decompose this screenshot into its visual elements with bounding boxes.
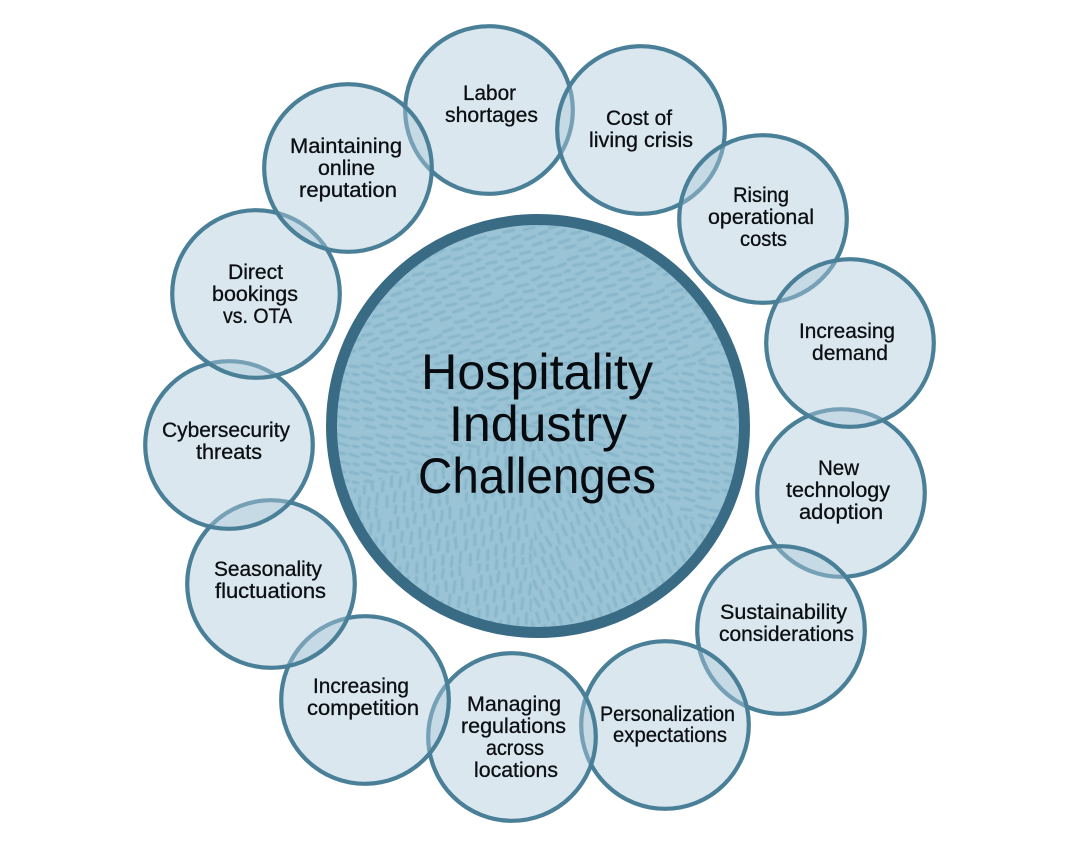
circle: Managing regulations across locations: regulations <box>461 715 566 738</box>
circle: Cost of living crisis: living crisis <box>589 129 693 152</box>
circle: Sustainability considerations: considerations <box>719 623 854 646</box>
circle: Direct bookings vs. OTA: bookings <box>212 283 298 306</box>
circle: Maintaining online reputation: Maintaining <box>290 135 402 158</box>
circle: Maintaining online reputation <box>264 84 432 252</box>
circle: Rising operational costs <box>679 135 847 303</box>
circle: Increasing competition: Increasing <box>313 675 409 698</box>
circle: New technology adoption: technology <box>786 479 891 502</box>
circle: Managing regulations across locations: across <box>486 737 544 760</box>
circle: Cost of living crisis <box>557 46 725 214</box>
circle: Direct bookings vs. OTA: Direct <box>228 261 283 284</box>
title: Hospitality <box>421 344 653 400</box>
center circle: Hospitality Industry Challenges <box>320 200 760 650</box>
circle: Labor shortages: Labor <box>463 82 516 105</box>
circle: Labor shortages: shortages <box>445 104 538 127</box>
circle: Rising operational costs: operational <box>708 206 814 229</box>
circle: Sustainability considerations <box>697 546 865 714</box>
circle: Rising operational costs: costs <box>740 228 787 251</box>
circle: Direct bookings vs. OTA <box>172 210 340 378</box>
circle: Increasing demand <box>766 259 934 427</box>
circle: Increasing demand: demand <box>812 342 888 365</box>
circle: Managing regulations across locations: locations <box>474 759 558 782</box>
circle: New technology adoption <box>757 409 925 577</box>
circle: Increasing demand: Increasing <box>799 320 895 343</box>
circle: Personalization expectations <box>581 641 749 809</box>
circle: Cybersecurity threats <box>145 361 313 529</box>
circle: Labor shortages <box>405 26 573 194</box>
circle: Managing regulations across locations: Managing <box>467 693 561 716</box>
circle: Maintaining online reputation: online <box>318 157 375 180</box>
circle: Personalization expectations: Personalization <box>600 703 735 726</box>
circle: Sustainability considerations: Sustainability <box>720 601 848 624</box>
circle: Cybersecurity threats: Cybersecurity <box>162 419 290 442</box>
title: Industry <box>449 396 627 452</box>
circle: Maintaining online reputation: reputation <box>299 179 397 202</box>
circle: New technology adoption: New <box>818 457 860 480</box>
circle: Cost of living crisis: Cost of <box>606 107 672 130</box>
circle: Personalization expectations: expectations <box>613 724 727 747</box>
title: Challenges <box>418 448 656 504</box>
circle: Seasonality fluctuations: Seasonality <box>214 558 322 581</box>
circle: Increasing competition: competition <box>307 697 419 720</box>
circle: Increasing competition <box>281 616 449 784</box>
circle: Seasonality fluctuations: fluctuations <box>215 580 326 603</box>
title <box>418 344 656 504</box>
circle: Rising operational costs: Rising <box>733 184 789 207</box>
circle: New technology adoption: adoption <box>799 501 883 524</box>
circle: Managing regulations across locations <box>428 653 596 821</box>
circle: Seasonality fluctuations <box>187 500 355 668</box>
circle: Direct bookings vs. OTA: vs. OTA <box>223 305 292 328</box>
circle: Cybersecurity threats: threats <box>196 441 262 464</box>
